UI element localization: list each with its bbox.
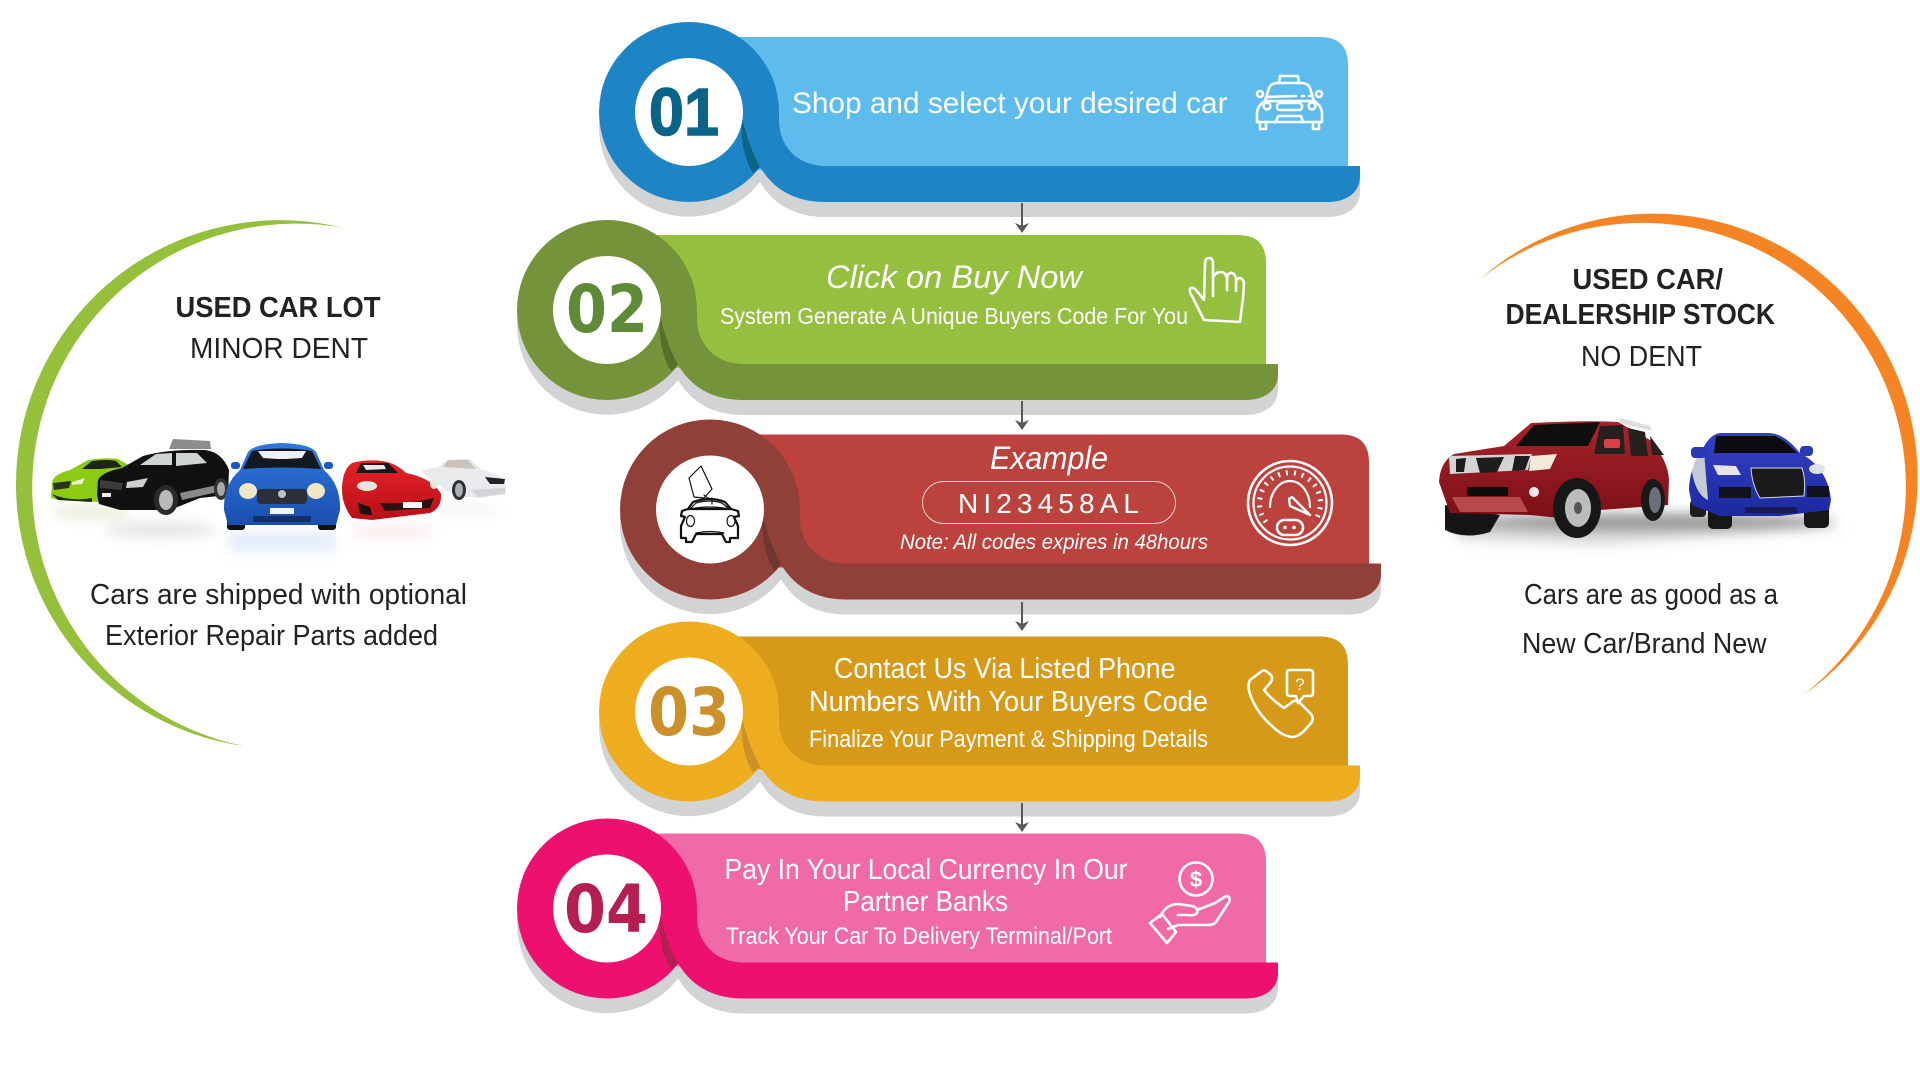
icon: hand holding dollar coin xyxy=(1150,862,1230,943)
description text: New Car/Brand New xyxy=(1522,628,1767,660)
green arc xyxy=(16,220,344,746)
step title: Numbers With Your Buyers Code xyxy=(809,686,1208,718)
icon: car with price tag xyxy=(681,466,739,542)
step title: Pay In Your Local Currency In Our xyxy=(724,854,1128,886)
step 04: pay xyxy=(517,818,1278,1014)
icon: phone with question bubble xyxy=(1248,670,1313,737)
number 03: 03 xyxy=(648,674,730,751)
note: Note: All codes expires in 48hours xyxy=(900,531,1208,554)
blue car xyxy=(224,443,340,530)
lime car xyxy=(51,458,136,502)
step 01: select car xyxy=(599,22,1360,217)
left panel: used car lot xyxy=(16,220,506,746)
floor reflections xyxy=(52,504,504,552)
heading: used car lot: USED CAR LOT xyxy=(176,292,381,324)
step title: Partner Banks xyxy=(843,886,1008,918)
arrow 1 to 2 xyxy=(1015,203,1029,233)
code pill xyxy=(922,482,1176,524)
orange arc xyxy=(1480,214,1918,695)
right panel: dealership stock xyxy=(1439,214,1918,695)
ground shadow xyxy=(1450,513,1840,545)
subheading: minor dent: MINOR DENT xyxy=(190,333,368,365)
step 02: click on buy now xyxy=(517,220,1278,415)
description text: Cars are shipped with optional xyxy=(90,579,467,611)
step 04 ribbon shape xyxy=(517,818,1278,1014)
heading: used car dealership stock xyxy=(1506,264,1775,331)
description text: Cars are as good as a xyxy=(1524,579,1779,611)
image: two SUVs xyxy=(1439,418,1840,545)
icon: hand holding dollar coin: $ xyxy=(1190,867,1202,892)
step 03: contact us xyxy=(599,622,1360,816)
arrow 2 to 3 xyxy=(1015,401,1029,430)
step title: Click on Buy Now xyxy=(826,259,1084,295)
heading: example: Example xyxy=(990,440,1108,476)
step 01 ribbon shape xyxy=(599,22,1360,217)
icon: phone with question bubble: ? xyxy=(1295,675,1305,694)
black car with roof box xyxy=(97,439,229,515)
image: row of five cars xyxy=(51,439,506,552)
step: example code xyxy=(620,420,1381,614)
description text xyxy=(1522,579,1779,660)
example ribbon shape xyxy=(620,420,1381,614)
step subtitle: System Generate A Unique Buyers Code For You xyxy=(720,303,1188,329)
heading: used car dealership stock: USED CAR/ xyxy=(1572,264,1723,296)
step title xyxy=(724,854,1128,918)
blue SUV xyxy=(1689,433,1831,529)
white convertible car xyxy=(421,459,506,500)
arrow 3 to 4 xyxy=(1015,602,1029,631)
subheading: no dent: NO DENT xyxy=(1581,341,1702,373)
icon: speedometer xyxy=(1248,461,1332,545)
number 02: 02 xyxy=(566,271,648,348)
step title xyxy=(809,653,1208,718)
heading: used car dealership stock: DEALERSHIP STOCK xyxy=(1506,299,1775,331)
step text: Shop and select your desired car xyxy=(792,87,1228,120)
description text xyxy=(90,579,467,652)
red car xyxy=(342,460,441,520)
step 03 ribbon shape xyxy=(599,622,1360,816)
step title: Contact Us Via Listed Phone xyxy=(834,653,1176,685)
code pill: NI23458AL xyxy=(958,488,1139,519)
number 04: 04 xyxy=(564,871,648,948)
step subtitle: Finalize Your Payment & Shipping Details xyxy=(809,726,1208,753)
description text: Exterior Repair Parts added xyxy=(105,620,438,652)
step 02 ribbon shape xyxy=(517,220,1278,415)
red SUV xyxy=(1439,418,1669,538)
icon: taxi xyxy=(1257,76,1322,129)
icon: pointing hand xyxy=(1190,258,1244,322)
arrow 4 to 5 xyxy=(1015,803,1029,832)
number 01: 01 xyxy=(649,75,719,150)
step subtitle: Track Your Car To Delivery Terminal/Port xyxy=(726,923,1112,950)
